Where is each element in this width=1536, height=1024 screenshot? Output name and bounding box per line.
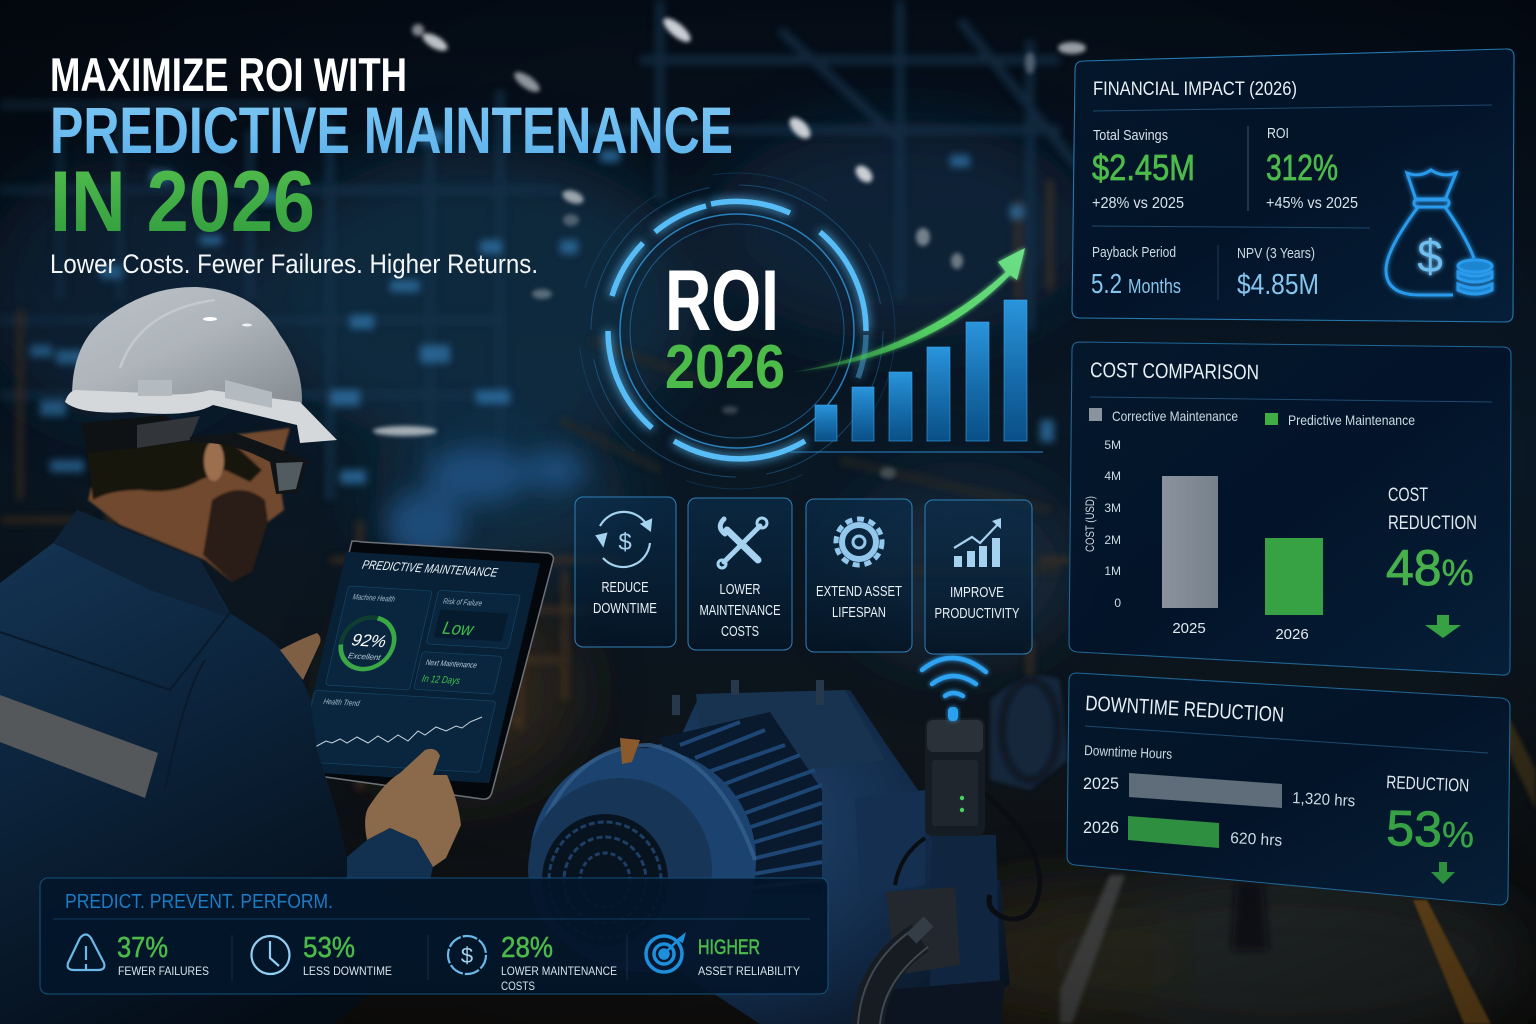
risk card: Low xyxy=(441,618,477,640)
pointing hand xyxy=(365,749,461,867)
pedestal and flange xyxy=(930,835,1000,990)
total savings: +28% vs 2025 xyxy=(1092,195,1184,212)
label: MAINTENANCE xyxy=(700,602,780,619)
bar chart: 1M xyxy=(1104,564,1121,578)
payback period: Months xyxy=(1128,276,1181,298)
cable xyxy=(985,794,1040,919)
end block xyxy=(855,790,925,895)
stat: lower maintenance costs: LOWER MAINTENANCE xyxy=(501,964,617,978)
title line 1: MAXIMIZE ROI WITH xyxy=(50,48,407,101)
bar chart: 2026 xyxy=(1275,626,1309,643)
stat: lower maintenance costs: 28% xyxy=(501,932,553,964)
ROI: +45% vs 2025 xyxy=(1266,195,1358,212)
bar chart: 5M xyxy=(1104,438,1121,452)
jacket xyxy=(0,510,433,1024)
bar chart xyxy=(790,300,1043,452)
icon: gear xyxy=(836,519,882,565)
stat: lower maintenance costs xyxy=(448,932,617,993)
callout: reduction: REDUCTION xyxy=(1386,772,1470,796)
heading: FINANCIAL IMPACT (2026) xyxy=(1093,79,1297,100)
ring xyxy=(579,173,895,489)
machine health card xyxy=(325,586,432,690)
cooling ribs xyxy=(659,712,822,894)
stat: less downtime: LESS DOWNTIME xyxy=(303,964,392,978)
ROI: ROI xyxy=(1267,125,1289,142)
icon: dollar cycle xyxy=(597,512,651,567)
title line 2: PREDICTIVE MAINTENANCE xyxy=(50,93,733,167)
total savings xyxy=(1092,127,1195,212)
panel: predict prevent perform xyxy=(40,878,828,994)
bar chart: 2025 xyxy=(1172,620,1206,637)
icon: money bag xyxy=(1386,170,1492,295)
body xyxy=(540,690,1010,1024)
2026 label: 2026 xyxy=(665,333,785,402)
bars: 620 hrs xyxy=(1230,830,1283,850)
panel: financial impact xyxy=(1072,49,1514,322)
far pump xyxy=(990,676,1068,790)
tablet xyxy=(290,541,553,799)
legend xyxy=(1089,408,1415,428)
tile: lower maintenance costs xyxy=(688,498,792,650)
title line 3: IN 2026 xyxy=(50,154,315,250)
bars: 1,320 hrs xyxy=(1292,790,1356,810)
ROI: 312% xyxy=(1266,147,1338,188)
label: DOWNTIME xyxy=(593,600,657,617)
heading: COST COMPARISON xyxy=(1090,359,1259,384)
reflective stripe xyxy=(0,695,158,798)
stat: less downtime xyxy=(252,932,392,978)
glasses xyxy=(190,433,308,494)
icon: target xyxy=(646,932,686,972)
screen title: PREDICTIVE MAINTENANCE xyxy=(361,558,499,580)
icon: rising bars xyxy=(954,518,1001,567)
subtitle: Lower Costs. Fewer Failures. Higher Returns. xyxy=(50,249,538,279)
worker xyxy=(0,287,433,1024)
holding hand xyxy=(280,633,321,680)
label: REDUCE xyxy=(602,579,648,596)
panel: cost comparison xyxy=(1069,342,1511,675)
stat: higher asset reliability xyxy=(646,932,800,978)
label: PRODUCTIVITY xyxy=(934,605,1020,622)
callout: reduction xyxy=(1386,772,1475,884)
bar chart: COST (USD) xyxy=(1083,496,1097,552)
NPV: NPV (3 Years) xyxy=(1237,245,1315,262)
icon: warning xyxy=(68,934,104,971)
bar chart: 0 xyxy=(1114,596,1121,610)
payback period xyxy=(1091,244,1181,299)
next maintenance card xyxy=(414,652,502,694)
screen xyxy=(295,552,540,783)
total savings: Total Savings xyxy=(1093,127,1168,144)
icon: dollar cycle: $ xyxy=(618,529,632,556)
bars xyxy=(1083,742,1356,850)
top box xyxy=(696,690,885,772)
total savings: $2.45M xyxy=(1092,147,1195,188)
label: LOWER xyxy=(720,581,761,598)
label: IMPROVE xyxy=(950,584,1004,601)
bar chart: 3M xyxy=(1104,501,1121,515)
tile: improve productivity xyxy=(925,500,1032,654)
head xyxy=(86,428,290,582)
bars: 2025 xyxy=(1083,774,1119,793)
heading: PREDICT. PREVENT. PERFORM. xyxy=(65,891,333,913)
callout: cost reduction: 48% xyxy=(1386,540,1474,596)
legend: Predictive Maintenance xyxy=(1288,412,1415,428)
stat: fewer failures xyxy=(68,932,209,978)
machine health card: Machine Health xyxy=(352,592,396,604)
payback period: Payback Period xyxy=(1092,244,1176,261)
stat: less downtime: 53% xyxy=(303,932,355,964)
icon: money bag: $ xyxy=(1417,230,1443,282)
icon: dollar gauge xyxy=(448,936,486,974)
risk card: Risk of Failure xyxy=(442,597,484,608)
heading: DOWNTIME REDUCTION xyxy=(1085,692,1285,727)
machine health card: 92% xyxy=(350,630,388,651)
machine health card: Excellent xyxy=(347,651,382,662)
icon: dollar gauge: $ xyxy=(461,943,473,968)
NPV: $4.85M xyxy=(1237,269,1319,301)
next maintenance card: Next Maintenance xyxy=(425,658,478,670)
bar chart: 4M xyxy=(1104,469,1121,483)
label: LIFESPAN xyxy=(832,604,886,621)
callout: reduction: 53% xyxy=(1386,800,1475,858)
hero title xyxy=(50,48,733,279)
stat: fewer failures: FEWER FAILURES xyxy=(118,964,209,978)
risk card xyxy=(426,590,521,649)
bars: Downtime Hours xyxy=(1084,742,1172,762)
growth arrow xyxy=(793,248,1025,372)
stat: higher asset reliability: ASSET RELIABILITY xyxy=(698,964,800,978)
tile: reduce downtime xyxy=(575,497,676,647)
legend: Corrective Maintenance xyxy=(1112,408,1238,424)
label: COSTS xyxy=(721,623,759,640)
health trend card xyxy=(298,690,496,772)
hard hat xyxy=(65,287,337,443)
motor with sensor xyxy=(528,658,1068,1024)
bar chart xyxy=(1083,438,1323,643)
payback period: 5.2 xyxy=(1091,268,1122,299)
tile: extend asset lifespan xyxy=(806,499,912,652)
icon: clock xyxy=(252,936,290,974)
panel: downtime reduction xyxy=(1067,673,1510,905)
cuff xyxy=(347,828,433,880)
hands xyxy=(280,633,461,880)
stat: higher asset reliability: HIGHER xyxy=(698,936,760,959)
headband xyxy=(80,415,200,453)
ROI ring and growth chart xyxy=(579,173,1043,489)
stat: lower maintenance costs: COSTS xyxy=(501,979,535,993)
icon: wrench and screwdriver xyxy=(718,518,767,568)
ROI label: ROI xyxy=(665,253,779,349)
icon: sensor with wifi xyxy=(922,658,986,836)
bars: 2026 xyxy=(1083,818,1119,837)
benefit tiles xyxy=(575,497,1032,654)
motor fan cover xyxy=(528,738,756,972)
callout: cost reduction xyxy=(1386,485,1477,638)
callout: cost reduction: COST xyxy=(1388,485,1428,506)
stat: fewer failures: 37% xyxy=(117,932,168,964)
pipe xyxy=(868,938,920,1024)
bar chart: 2M xyxy=(1104,533,1121,547)
callout: cost reduction: REDUCTION xyxy=(1388,513,1477,534)
NPV xyxy=(1237,245,1319,301)
trend line xyxy=(315,717,482,747)
label: EXTEND ASSET xyxy=(816,583,902,600)
health trend card: Health Trend xyxy=(323,697,361,708)
ROI xyxy=(1266,125,1358,212)
next maintenance card: In 12 Days xyxy=(421,674,461,687)
